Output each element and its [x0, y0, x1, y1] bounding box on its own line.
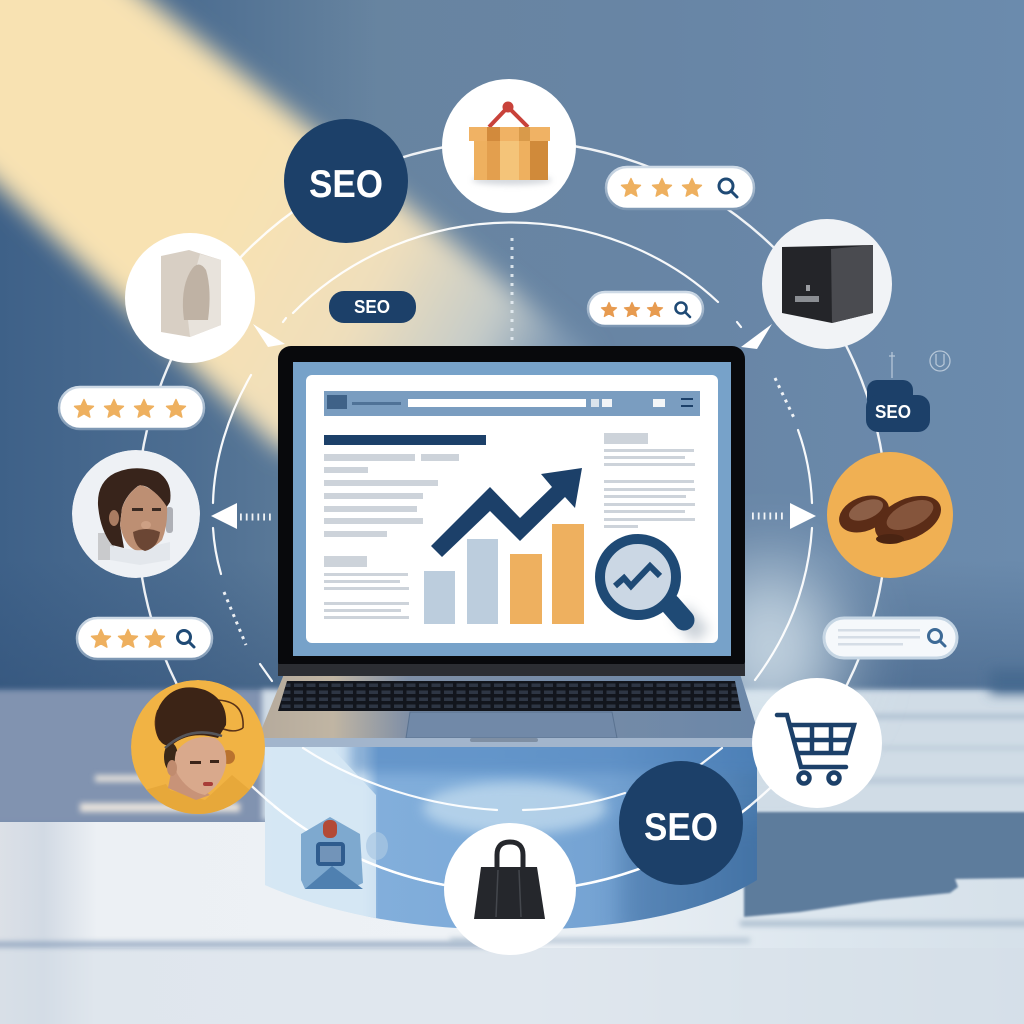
- badge: SEO cloud: SEO: [875, 402, 911, 422]
- magnifier icon: [600, 539, 702, 636]
- icon: gift box: [469, 102, 552, 185]
- circle: SEO bottom: [619, 761, 743, 885]
- pill: three stars and search, left: [77, 618, 212, 659]
- portrait: face: [120, 485, 167, 550]
- badge: SEO cloud: [866, 380, 930, 432]
- portrait: neck: [168, 772, 210, 800]
- right text block: [604, 433, 695, 528]
- circle: black box product: [762, 219, 892, 349]
- portrait: beard: [133, 529, 160, 551]
- portrait: collar: [110, 542, 170, 565]
- circle: SEO top: SEO: [309, 163, 383, 206]
- icon: shopping cart: [777, 715, 854, 784]
- portrait: hair: [156, 687, 226, 746]
- page headline: [324, 435, 486, 445]
- arrow: top right: [741, 324, 772, 349]
- pill: three stars and search, centre: [588, 292, 703, 326]
- outer orbit ring: [137, 141, 887, 891]
- growth arrow: [431, 468, 582, 557]
- pill: SEO small label: [329, 291, 416, 323]
- floor light streaks and shadows: [0, 670, 1024, 947]
- laptop: [258, 346, 760, 747]
- circle: gift box: [442, 79, 576, 213]
- portrait: side shading: [98, 533, 114, 560]
- icon: black cube: [782, 245, 873, 323]
- bar chart: [424, 524, 584, 624]
- circle: coffee beans product: [827, 452, 953, 578]
- portrait: hair: [98, 468, 170, 548]
- small outline icon: [889, 351, 950, 378]
- laptop front lip: [262, 738, 757, 747]
- circle: shopping cart: [752, 678, 882, 808]
- circle: handbag product: [444, 823, 576, 955]
- arrow: top left: [253, 324, 285, 347]
- portrait: face: [175, 737, 226, 795]
- circle: SEO bottom: SEO: [644, 806, 718, 849]
- pill: SEO small label: SEO: [354, 297, 390, 317]
- pill: three stars and search, top right: [606, 167, 754, 209]
- keyboard: [278, 681, 741, 711]
- screen bezel: [278, 346, 745, 675]
- icon: carved block: [161, 250, 221, 337]
- arrow: left towards person: [211, 503, 237, 529]
- arrow: right towards product: [790, 503, 816, 529]
- light glow right of laptop: [700, 565, 840, 735]
- screen: [293, 362, 731, 656]
- product: gift pouch on pedestal: [301, 817, 388, 889]
- pill: search field: [824, 618, 957, 658]
- portrait: curly wisps: [155, 700, 243, 740]
- pill: four stars: [59, 387, 204, 429]
- inner orbit arcs: [213, 222, 812, 810]
- icon: coffee beans: [834, 486, 948, 552]
- portrait: collar: [146, 776, 250, 814]
- circle: SEO top: [284, 119, 408, 243]
- circle: woman portrait: [131, 680, 265, 820]
- web page panel: [306, 375, 718, 643]
- light beam: [0, 0, 590, 490]
- circle: man portrait: [72, 450, 200, 578]
- page header bar: [324, 391, 700, 416]
- outer ring over pedestal: [274, 806, 750, 891]
- circle: cardboard product: [125, 233, 255, 363]
- dotted guide lines: [224, 238, 795, 645]
- left text block: [324, 454, 459, 619]
- laptop deck: [258, 674, 760, 738]
- pedestal cylinder: [265, 747, 757, 929]
- icon: handbag: [474, 842, 545, 919]
- trackpad: [406, 712, 617, 738]
